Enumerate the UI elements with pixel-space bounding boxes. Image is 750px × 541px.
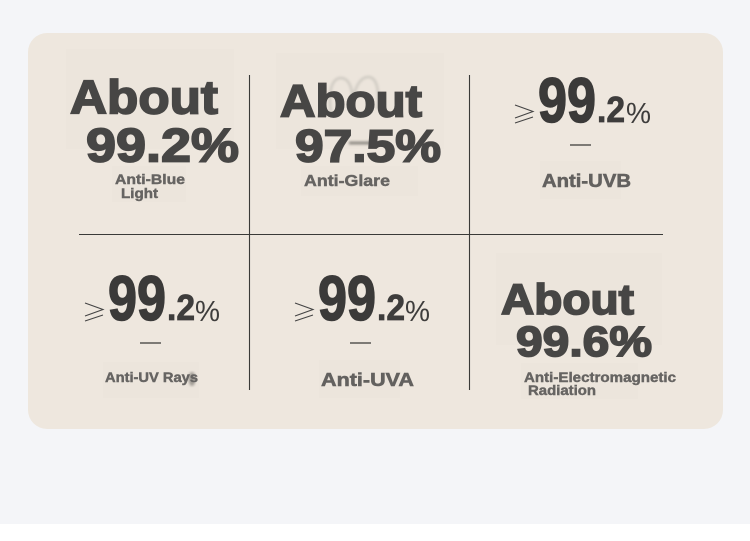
panel: protection stats card — [28, 33, 723, 429]
stat: anti-glare — [280, 76, 441, 190]
stat: anti-glare: 97.5% — [295, 120, 441, 172]
grid lines — [79, 75, 663, 390]
stat: anti-UV rays: Anti-UV Rays — [105, 369, 198, 385]
stat: anti-electromagnetic radiation: Radiation — [528, 382, 596, 398]
stat: anti-electromagnetic radiation — [501, 276, 676, 398]
stat: anti-UVB: % — [626, 98, 651, 130]
stat: anti-electromagnetic radiation: About — [501, 276, 634, 324]
stat: anti-UVB: .2 — [597, 89, 625, 130]
stat: anti-UV rays: % — [195, 296, 220, 328]
stat: anti-electromagnetic radiation: 99.6% — [516, 318, 652, 366]
stat: anti-UVB: Anti-UVB — [542, 171, 631, 191]
stat: anti-blue light: About — [70, 70, 218, 124]
stat: anti-glare: Anti-Glare — [304, 173, 390, 190]
stat: anti-UV rays — [85, 264, 220, 386]
stat: anti-electromagnetic radiation: Anti-Electromagnetic — [524, 369, 676, 385]
stat: anti-UVA: 99 — [318, 264, 376, 334]
stat: anti-UVB — [515, 66, 651, 191]
stat: anti-UVA: % — [405, 296, 430, 328]
stat: anti-blue light: 99.2% — [86, 118, 239, 172]
stat: anti-UVA — [295, 264, 430, 390]
icon: faint glasses smudge — [330, 77, 378, 143]
stat: anti-blue light: Light — [121, 185, 158, 201]
stat: anti-UVA: .2 — [377, 287, 405, 328]
stat: anti-blue light — [70, 70, 239, 201]
stat: anti-blue light: Anti-Blue — [115, 171, 185, 187]
stat: anti-glare: About — [280, 76, 422, 126]
stat: anti-UVA: Anti-UVA — [321, 370, 414, 390]
stat: anti-UV rays: .2 — [167, 287, 195, 328]
stat: anti-UVB: 99 — [538, 66, 596, 136]
stat: anti-UV rays: 99 — [108, 264, 166, 334]
